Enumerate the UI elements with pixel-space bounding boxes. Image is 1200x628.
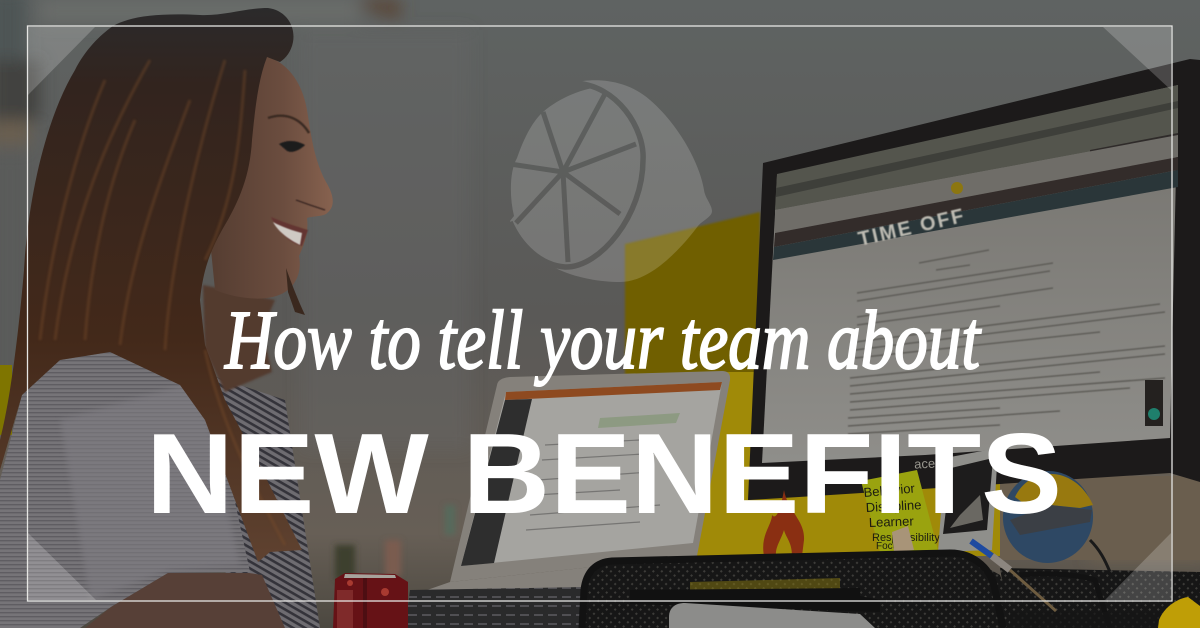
pen xyxy=(971,541,1056,611)
laptop xyxy=(405,371,730,628)
round badge xyxy=(994,463,1102,571)
logo: halved lemon xyxy=(510,80,712,282)
arm xyxy=(85,573,285,628)
monitor: acer xyxy=(914,455,940,472)
title: main heading: NEW BENEFITS xyxy=(146,411,1062,538)
neck and face xyxy=(203,55,333,392)
person: woman in striped shirt xyxy=(0,8,333,628)
green sticky note: Focus xyxy=(876,541,903,552)
green sticky note xyxy=(861,470,940,552)
hair xyxy=(0,8,305,562)
screen heading: TIME OFF xyxy=(856,205,968,251)
title: script line: How to tell your team about xyxy=(224,294,982,387)
polaroid photo xyxy=(938,448,998,552)
blurred shelf objects xyxy=(335,505,455,580)
soda can xyxy=(333,573,408,628)
cable xyxy=(1090,540,1110,572)
green sticky note: Learner xyxy=(869,513,915,530)
desk items xyxy=(763,448,1110,572)
green sticky note: Discipline xyxy=(865,497,922,515)
paper roll xyxy=(669,603,875,628)
eye and brow xyxy=(268,116,309,133)
green sticky note: Responsibility xyxy=(872,532,940,544)
monitor screen xyxy=(762,85,1178,463)
green sticky note: Behavior xyxy=(863,481,916,500)
yellow wall panel xyxy=(625,212,1200,560)
monitor xyxy=(748,59,1200,500)
mesh desk organizer xyxy=(582,541,1200,628)
laptop keyboard xyxy=(405,587,585,628)
smile xyxy=(271,217,308,246)
flame sticker xyxy=(763,490,804,556)
shirt xyxy=(0,352,320,628)
lemon sticker xyxy=(1158,597,1200,628)
